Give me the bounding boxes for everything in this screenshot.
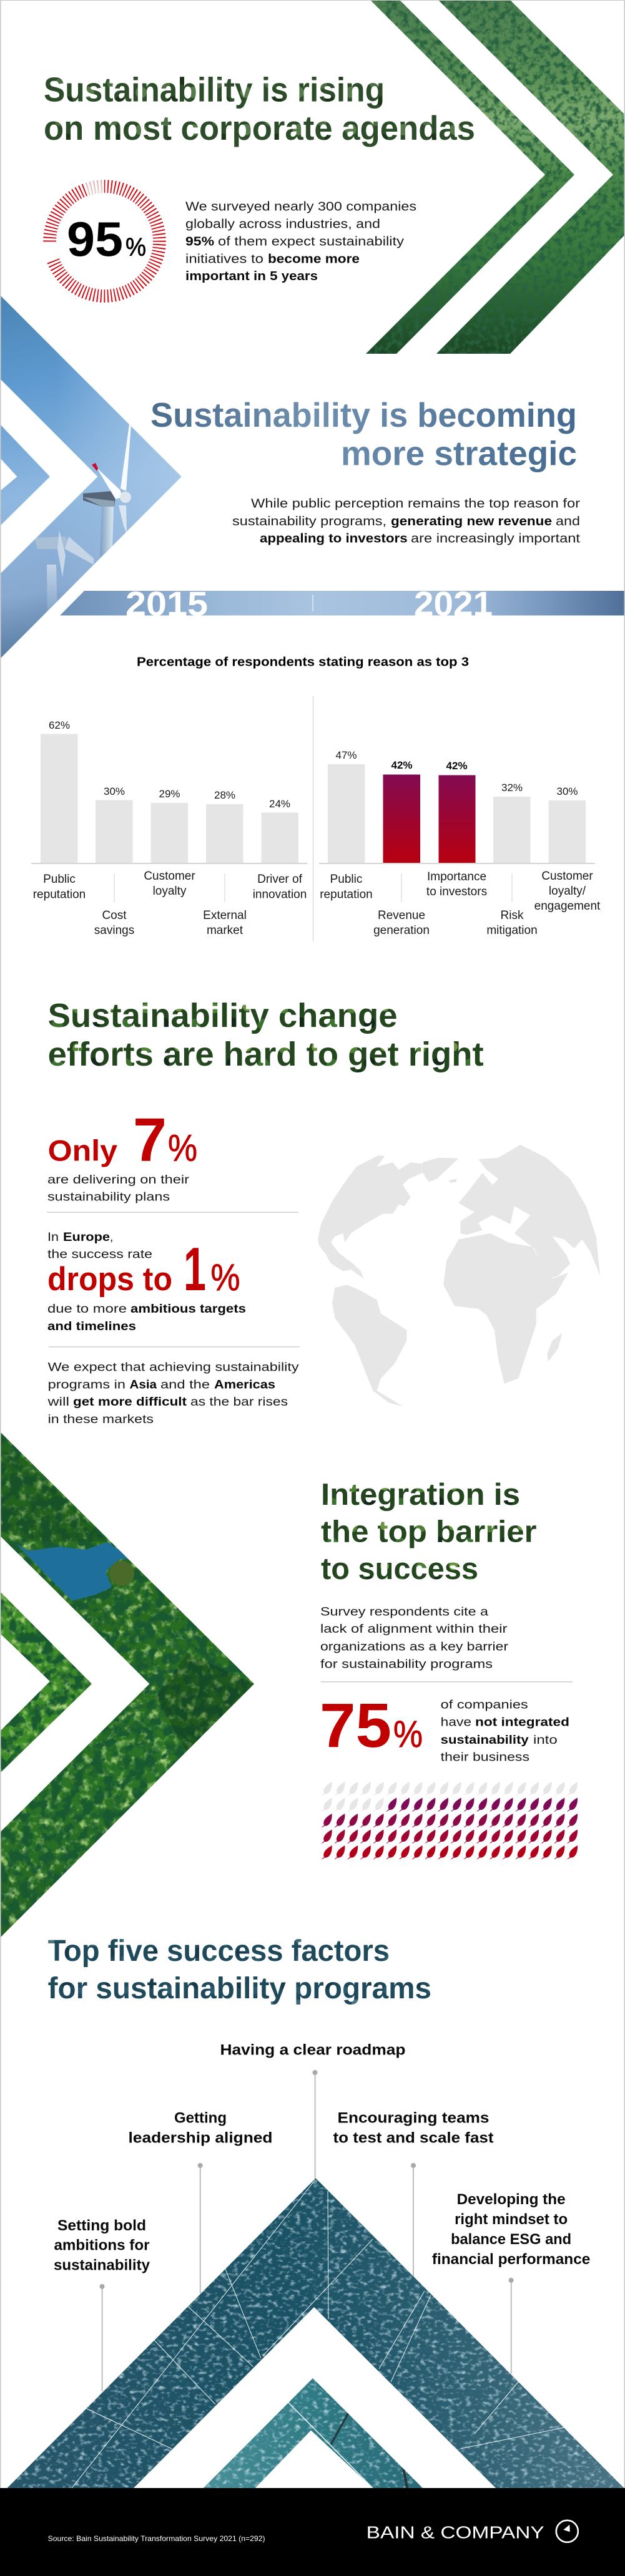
stat: Europe drops to 1 percent: , bbox=[110, 1231, 113, 1244]
stat: 75 percent: % bbox=[393, 1713, 423, 1755]
factor: getting leadership aligned: leadership aligned bbox=[129, 2129, 272, 2146]
bar chart: 2015: savings bbox=[94, 924, 134, 937]
title: becoming more strategic bbox=[150, 396, 577, 473]
forest and lake chevron: outer band bbox=[0, 1432, 254, 1938]
text: survey respondents: organizations as a key barrier bbox=[320, 1641, 509, 1654]
title: integration barrier: Integration is bbox=[321, 1478, 520, 1512]
bar chart: 2021: Public bbox=[330, 873, 362, 886]
bar chart: 2015 bbox=[31, 719, 307, 937]
text: survey summary: become more bbox=[268, 252, 360, 266]
stat: only 7 percent: sustainability plans bbox=[47, 1190, 170, 1204]
blue chevron with wind turbines bbox=[0, 295, 181, 659]
bar chart: 2021: 30% bbox=[556, 785, 578, 797]
factor: encouraging teams: to test and scale fast bbox=[333, 2129, 493, 2146]
text: survey respondents bbox=[320, 1606, 509, 1671]
bar chart: 2015: innovation bbox=[253, 888, 307, 901]
bar chart: 2021: Customer bbox=[541, 870, 593, 883]
text: Asia and Americas outlook: programs in bbox=[48, 1379, 125, 1391]
stat: Europe drops to 1 percent: ambitious targets bbox=[130, 1303, 246, 1316]
stat: 75 percent: have bbox=[441, 1716, 471, 1729]
stat: only 7 percent: Only bbox=[48, 1134, 117, 1167]
bar chart: 2015: 30% bbox=[104, 785, 125, 797]
bar chart: 2015: loyalty bbox=[153, 885, 187, 898]
factor: encouraging teams bbox=[333, 2110, 493, 2146]
stat: only 7 percent: are delivering on their bbox=[47, 1174, 190, 1187]
text: strategic intro: are increasingly important bbox=[411, 532, 581, 546]
forest chevron: inner band bbox=[0, 1592, 92, 1773]
bar chart: 2021: 32% bbox=[501, 782, 523, 794]
text: Asia and Americas outlook: get more difficult bbox=[73, 1396, 187, 1409]
year band: 2015 and 2021: 2021 bbox=[414, 584, 493, 623]
factor: setting bold ambitions: Setting bold bbox=[57, 2217, 146, 2234]
bar chart: 2015: Customer bbox=[144, 870, 195, 883]
title: becoming more strategic: Sustainability is becoming bbox=[150, 396, 577, 434]
text: strategic intro: generating new revenue bbox=[391, 515, 552, 528]
donut: 95 percent tick ring: 95 bbox=[67, 211, 123, 266]
title: integration barrier: the top barrier bbox=[321, 1515, 537, 1548]
title: top five success factors: Top five success factors bbox=[48, 1935, 390, 1968]
bar chart: 2015: Cost bbox=[102, 909, 127, 922]
stat: 75 percent: sustainability bbox=[441, 1734, 529, 1747]
factor: developing the right mindset: right mindset to bbox=[455, 2211, 568, 2228]
bar chart: 2015: 24% bbox=[269, 798, 290, 810]
bar chart: 2021: Risk bbox=[501, 909, 524, 922]
text: strategic intro: and bbox=[556, 515, 580, 528]
text: survey summary: globally across industries, and bbox=[185, 218, 380, 231]
bar chart: 2015: 62% bbox=[49, 719, 70, 731]
title: change efforts are hard: Sustainability change bbox=[48, 997, 398, 1034]
stat: only 7 percent: 7 bbox=[133, 1106, 167, 1174]
text: strategic intro: appealing to investors bbox=[260, 532, 408, 546]
stat: 75 percent bbox=[320, 1691, 569, 1764]
title: change efforts are hard: efforts are hard to get right bbox=[48, 1036, 484, 1073]
factor: getting leadership aligned bbox=[129, 2110, 272, 2146]
text: survey respondents: for sustainability programs bbox=[320, 1658, 493, 1671]
text: survey summary: of them expect sustainability bbox=[218, 235, 404, 249]
source note: Source: Bain Sustainability Transformation Survey 2021 (n=292) bbox=[48, 2534, 265, 2543]
text: survey respondents: Survey respondents cite a bbox=[320, 1606, 489, 1618]
bar chart: 2015: 28% bbox=[214, 789, 235, 801]
title: integration barrier bbox=[321, 1478, 537, 1586]
bar chart: 2021: Importance bbox=[427, 870, 486, 883]
title: rising on corporate agendas: on most corporate agendas bbox=[44, 109, 475, 147]
stat: only 7 percent bbox=[47, 1106, 197, 1204]
title: becoming more strategic: more strategic bbox=[341, 434, 577, 473]
stat: Europe drops to 1 percent: drops to bbox=[47, 1261, 172, 1298]
bar chart: 2021: Revenue bbox=[378, 909, 425, 922]
logo mark bbox=[556, 2520, 578, 2542]
stat: Europe drops to 1 percent: due to more bbox=[47, 1303, 127, 1316]
factor: developing the right mindset: Developing the bbox=[457, 2191, 566, 2208]
bar chart: 2021: to investors bbox=[426, 885, 487, 898]
text: Asia and Americas outlook: in these markets bbox=[48, 1413, 154, 1426]
forest chevron: inner band bbox=[366, 0, 574, 354]
title: top five success factors bbox=[48, 1935, 431, 2005]
stat: 75 percent: into bbox=[533, 1734, 558, 1747]
stat: Europe drops to 1 percent bbox=[47, 1231, 246, 1333]
text: survey summary: initiatives to bbox=[185, 252, 263, 266]
text: Asia and Americas outlook: We expect that achieving sustainability bbox=[48, 1361, 299, 1374]
donut: 95 percent tick ring bbox=[50, 180, 159, 296]
forest chevron: outer band bbox=[436, 0, 625, 354]
title: integration barrier: to success bbox=[321, 1552, 478, 1586]
title: rising on corporate agendas bbox=[44, 70, 475, 147]
text: survey summary: important in 5 years bbox=[185, 270, 318, 283]
bar chart: 2021 bbox=[319, 749, 601, 937]
donut: 95 percent tick ring: % bbox=[125, 233, 146, 261]
text: survey summary: We surveyed nearly 300 companies bbox=[185, 200, 416, 213]
stat: Europe drops to 1 percent: In bbox=[47, 1231, 59, 1244]
factor: setting bold ambitions: ambitions for bbox=[54, 2237, 150, 2254]
factor: developing the right mindset: financial performance bbox=[432, 2251, 590, 2268]
year band: 2015 and 2021 bbox=[60, 584, 625, 623]
stat: Europe drops to 1 percent: % bbox=[211, 1256, 240, 1298]
chart title: Percentage of respondents stating reason as top 3 bbox=[137, 655, 469, 669]
leaf grid: 75 of 100 coloured bbox=[322, 1782, 578, 1859]
stat: 75 percent: their business bbox=[441, 1751, 529, 1764]
bar chart: 2015: Public bbox=[43, 873, 76, 886]
factor: developing the right mindset: balance ESG and bbox=[451, 2231, 571, 2248]
world globe bbox=[318, 1145, 600, 1406]
text: strategic intro bbox=[232, 497, 581, 546]
stat: 75 percent: not integrated bbox=[475, 1716, 569, 1729]
factor: setting bold ambitions bbox=[54, 2217, 150, 2274]
bar chart: 2021: engagement bbox=[534, 900, 601, 913]
factor: getting leadership aligned: Getting bbox=[174, 2110, 227, 2126]
text: Asia and Americas outlook bbox=[47, 1361, 299, 1426]
bar chart: 2015: market bbox=[207, 924, 244, 937]
footer band bbox=[0, 2488, 625, 2576]
bar chart: 2015: reputation bbox=[33, 888, 86, 901]
factor: developing the right mindset bbox=[432, 2191, 590, 2268]
leader lines and dots bbox=[100, 2070, 514, 2391]
bar chart: 2021: generation bbox=[373, 924, 430, 937]
bar chart: 2021: 47% bbox=[335, 749, 357, 761]
factor: setting bold ambitions: sustainability bbox=[54, 2257, 150, 2274]
text: survey summary: 95% bbox=[185, 235, 214, 249]
water roof chevron: inner band bbox=[203, 2378, 423, 2488]
water roof chevron: outer band bbox=[7, 2178, 624, 2488]
text: strategic intro: While public perception remains the top reason for bbox=[251, 497, 580, 511]
logo wordmark: BAIN & COMPANY bbox=[367, 2522, 544, 2542]
text: Asia and Americas outlook: Americas bbox=[214, 1379, 275, 1391]
bar chart: 2015: 29% bbox=[159, 788, 180, 800]
stat: only 7 percent: % bbox=[168, 1127, 197, 1169]
bar chart: 2015: Driver of bbox=[257, 873, 303, 886]
text: Asia and Americas outlook: will bbox=[47, 1396, 69, 1409]
factor: encouraging teams: Encouraging teams bbox=[337, 2110, 490, 2126]
stat: 75 percent: of companies bbox=[441, 1699, 528, 1712]
bar chart: 2021: 42% bbox=[391, 759, 413, 771]
text: Asia and Americas outlook: as the bar rises bbox=[190, 1396, 288, 1409]
year band: 2015 and 2021: 2015 bbox=[125, 584, 208, 623]
stat: Europe drops to 1 percent: and timelines bbox=[47, 1320, 136, 1333]
stat: 75 percent: 75 bbox=[320, 1691, 391, 1761]
stat: Europe drops to 1 percent: the success rate bbox=[47, 1248, 152, 1261]
factor: having a clear roadmap: Having a clear roadmap bbox=[220, 2041, 406, 2059]
text: strategic intro: sustainability programs, bbox=[232, 515, 386, 528]
bar chart: 2021: reputation bbox=[320, 888, 373, 901]
bar chart: 2015: External bbox=[203, 909, 247, 922]
text: survey summary bbox=[185, 200, 416, 283]
title: change efforts are hard bbox=[48, 997, 484, 1073]
text: Asia and Americas outlook: and the bbox=[160, 1379, 210, 1391]
text: survey respondents: lack of alignment within their bbox=[320, 1623, 508, 1636]
stat: Europe drops to 1 percent: 1 bbox=[184, 1235, 206, 1303]
stat: Europe drops to 1 percent: Europe bbox=[63, 1231, 110, 1244]
text: Asia and Americas outlook: Asia bbox=[130, 1379, 157, 1391]
bar chart: 2021: mitigation bbox=[486, 924, 538, 937]
bar chart: 2021: 42% bbox=[446, 760, 468, 772]
title: top five success factors: for sustainability programs bbox=[48, 1972, 431, 2005]
bar chart: 2021: loyalty/ bbox=[549, 885, 586, 898]
title: rising on corporate agendas: Sustainability is rising bbox=[44, 70, 385, 109]
